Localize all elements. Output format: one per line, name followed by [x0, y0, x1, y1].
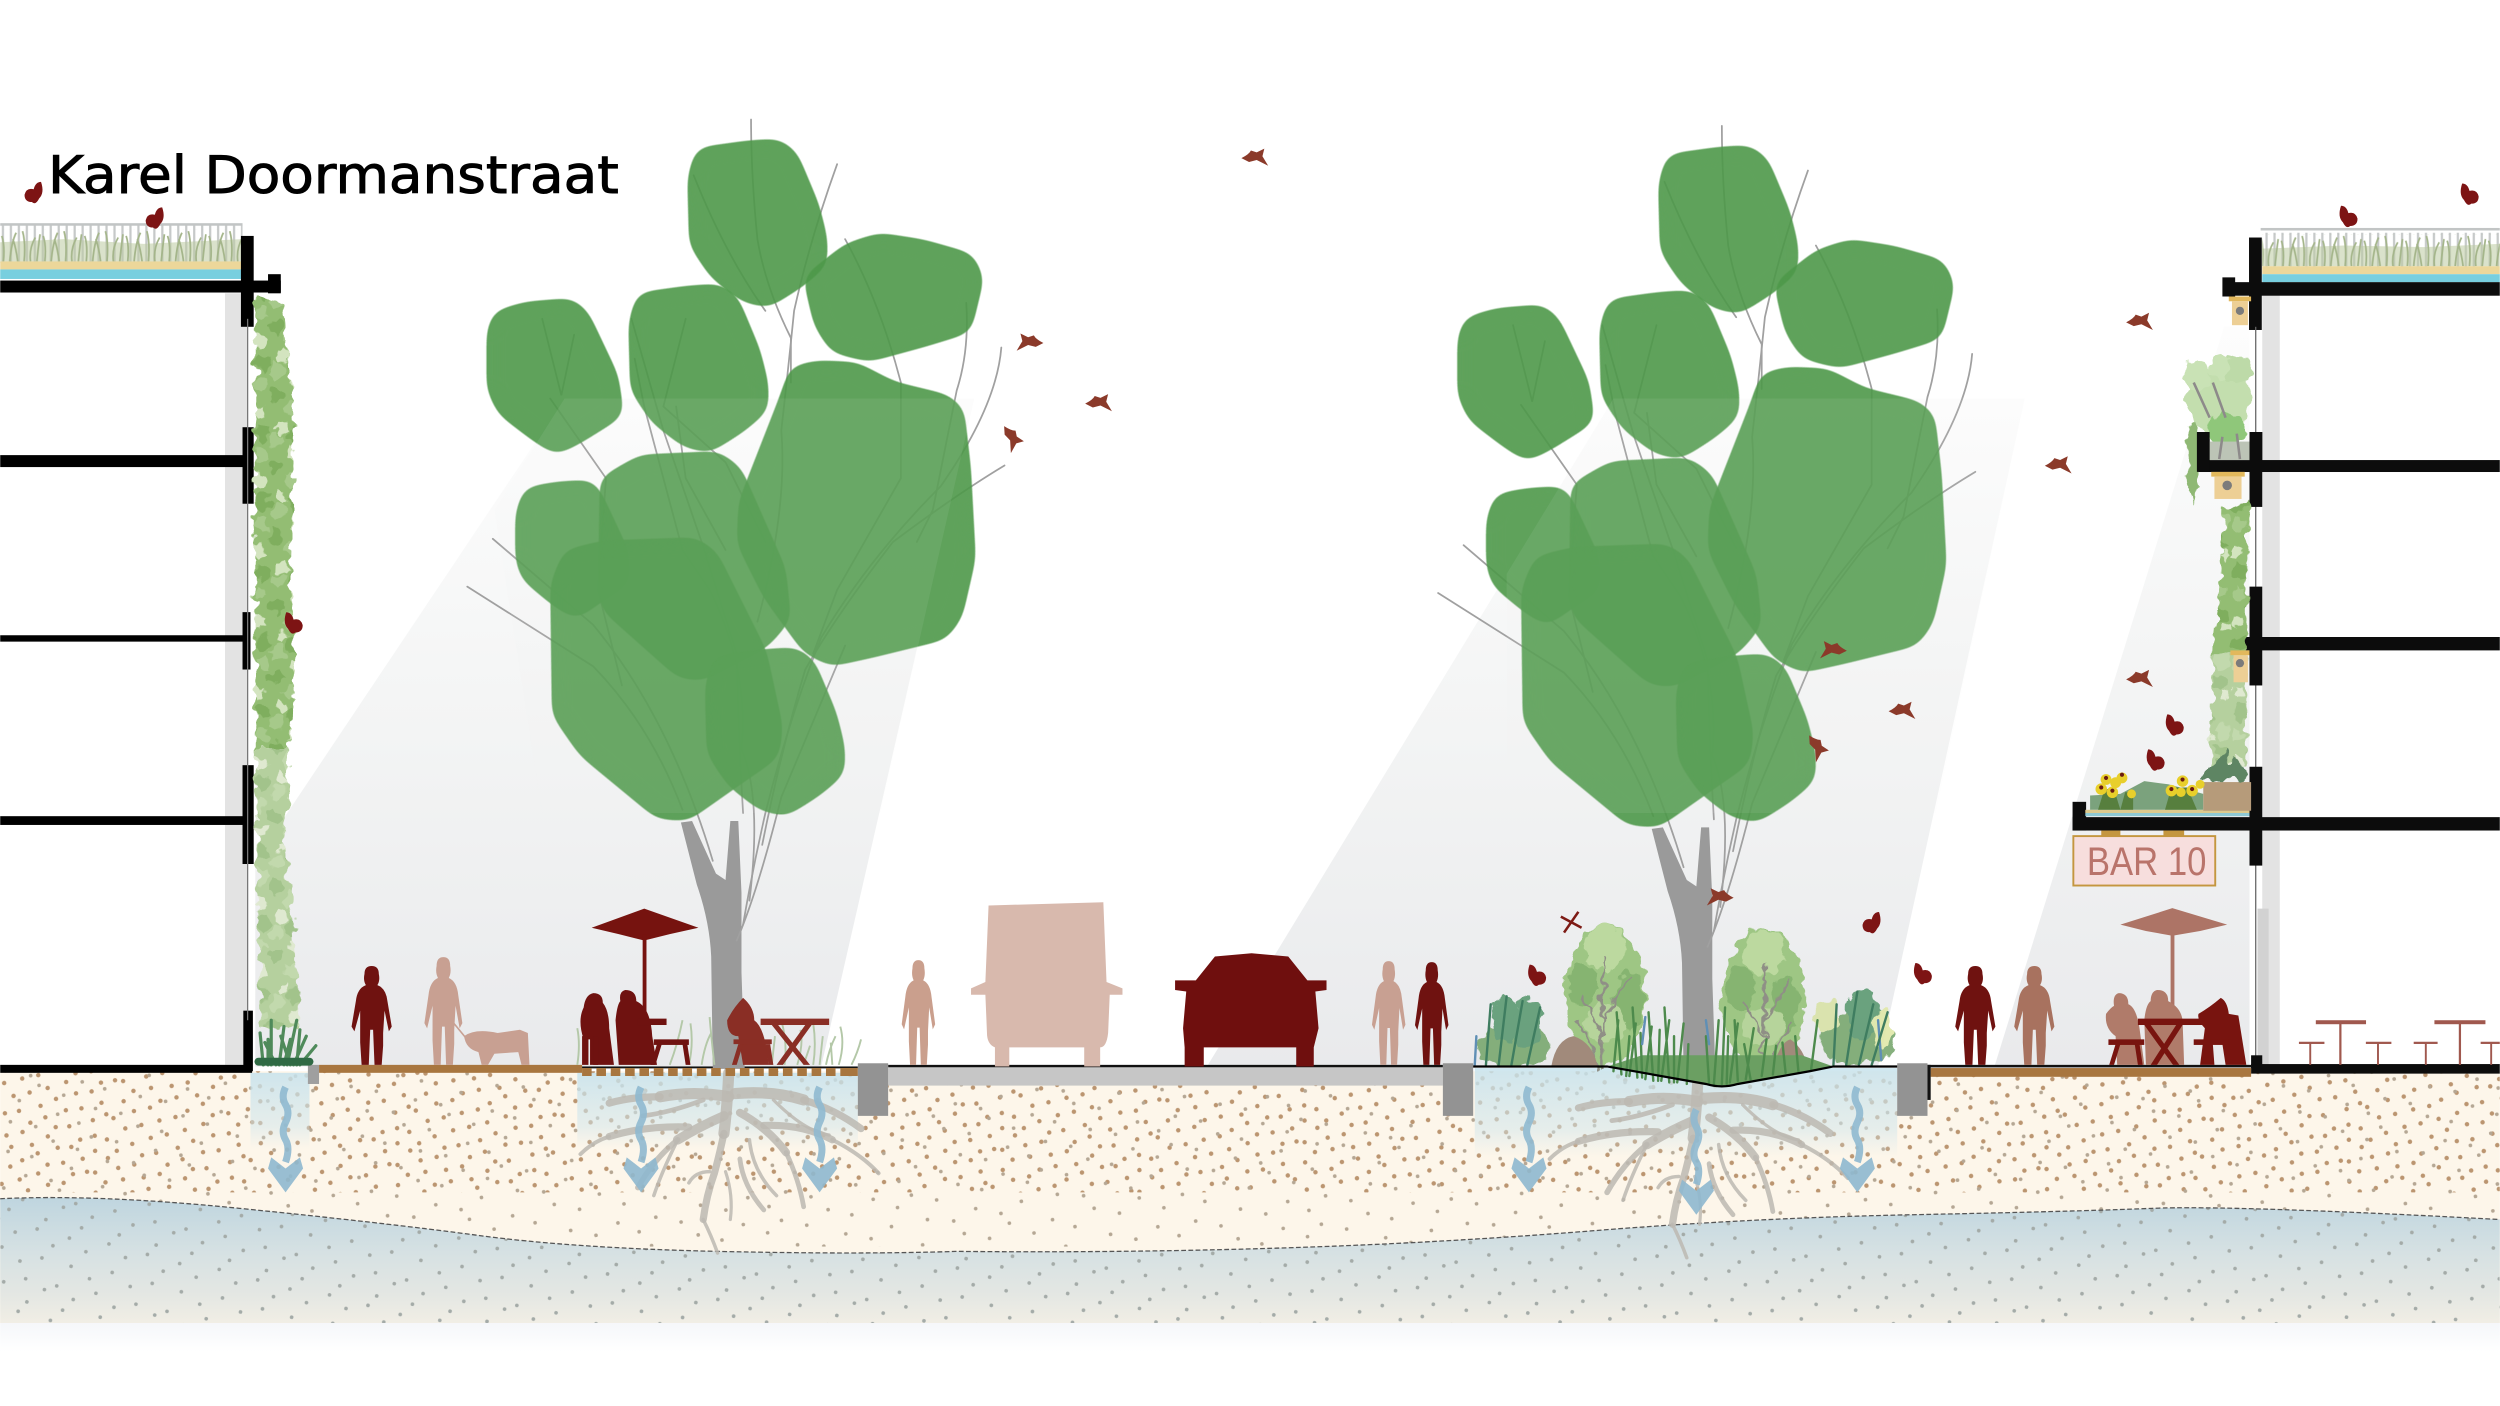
light veil over canopies — [494, 399, 2025, 813]
dog — [451, 1020, 529, 1065]
right upper planter plant — [2183, 354, 2251, 504]
birds — [997, 149, 2153, 905]
arrow 4 — [1511, 1087, 1547, 1192]
arrow 1 — [268, 1087, 303, 1192]
light wedges: right tree — [1207, 399, 2025, 1066]
shrub left — [1566, 925, 1645, 1066]
low foliage left — [1476, 998, 1553, 1066]
right building — [2073, 228, 2500, 1074]
tree roots: left — [580, 1073, 879, 1253]
right slabs and columns — [2073, 238, 2500, 1074]
leaves — [496, 148, 974, 811]
curbs — [308, 1063, 1927, 1116]
swale line — [1473, 1066, 1897, 1086]
title: Karel Doormanstraat — [48, 146, 619, 206]
street surface — [308, 1063, 2251, 1116]
arrow 6 — [1840, 1087, 1875, 1192]
left grasses — [577, 1017, 861, 1065]
balcony planting — [2085, 749, 2251, 816]
right roof layers — [2261, 228, 2500, 282]
grasses — [1475, 992, 1888, 1084]
person: right pavement dark — [1955, 966, 1995, 1065]
left building: interior shade — [225, 293, 247, 1065]
branches — [467, 120, 1005, 941]
soil — [0, 1071, 2500, 1323]
low foliage right — [1813, 988, 1896, 1065]
groundwater layer — [0, 1196, 2500, 1323]
left roof layers — [0, 223, 243, 279]
person: road side dark — [1415, 962, 1448, 1065]
person: walking dog — [424, 957, 462, 1065]
butterflies — [25, 182, 2479, 986]
pavement left — [319, 1065, 582, 1073]
left slabs and columns — [0, 236, 281, 1073]
interior cafe furniture — [2299, 1020, 2500, 1065]
right building: interior shade — [2262, 295, 2280, 1065]
infiltration zones — [250, 1068, 1897, 1157]
tree: right — [1438, 126, 1975, 1074]
bird boxes — [2211, 297, 2251, 682]
sign hangers — [2101, 831, 2184, 837]
arrow 2 — [624, 1087, 659, 1192]
planter herb — [2200, 749, 2250, 781]
paver strip — [582, 1066, 858, 1076]
umbrella right — [2120, 908, 2227, 1014]
sign BAR 10: BAR 10 — [2087, 840, 2206, 884]
light wedges: right building — [1994, 327, 2250, 1066]
cyclist — [902, 960, 935, 1065]
water arrows — [268, 1087, 1875, 1215]
right climbing vine — [2210, 504, 2246, 772]
person: road side faded — [1372, 961, 1405, 1065]
rain garden planting — [1473, 925, 1897, 1086]
umbrella left — [592, 909, 698, 1020]
left climbing vine — [255, 297, 297, 1028]
shrub right — [1722, 928, 1805, 1068]
cafe table left with seated people — [580, 990, 690, 1065]
left planting: fern — [258, 1020, 316, 1065]
arrow 5 — [1679, 1109, 1714, 1215]
person: right pavement faded — [2014, 966, 2054, 1065]
planter box — [2203, 782, 2251, 811]
person: left pavement dark — [352, 966, 392, 1065]
bottom fade — [0, 1323, 2500, 1352]
seated person and table near tree — [727, 998, 829, 1065]
tree: left — [467, 120, 1005, 1068]
yellow flowers — [2096, 773, 2205, 798]
left building — [0, 223, 281, 1073]
tree roots: right — [1550, 1078, 1848, 1258]
pavement right — [1931, 1068, 2251, 1077]
van rear — [971, 902, 1122, 1066]
trunk — [681, 821, 745, 1068]
boulders — [1551, 1036, 1808, 1070]
road bed — [888, 1068, 1443, 1086]
car rear — [1175, 953, 1327, 1066]
swale ground cover — [1607, 1055, 1833, 1086]
light wedges: left tree — [255, 399, 974, 1066]
arrow 3 — [802, 1087, 837, 1192]
right cafe seated people — [2106, 990, 2246, 1065]
right slabs redraw over planter — [2197, 432, 2262, 472]
dragonfly — [1561, 912, 1582, 933]
